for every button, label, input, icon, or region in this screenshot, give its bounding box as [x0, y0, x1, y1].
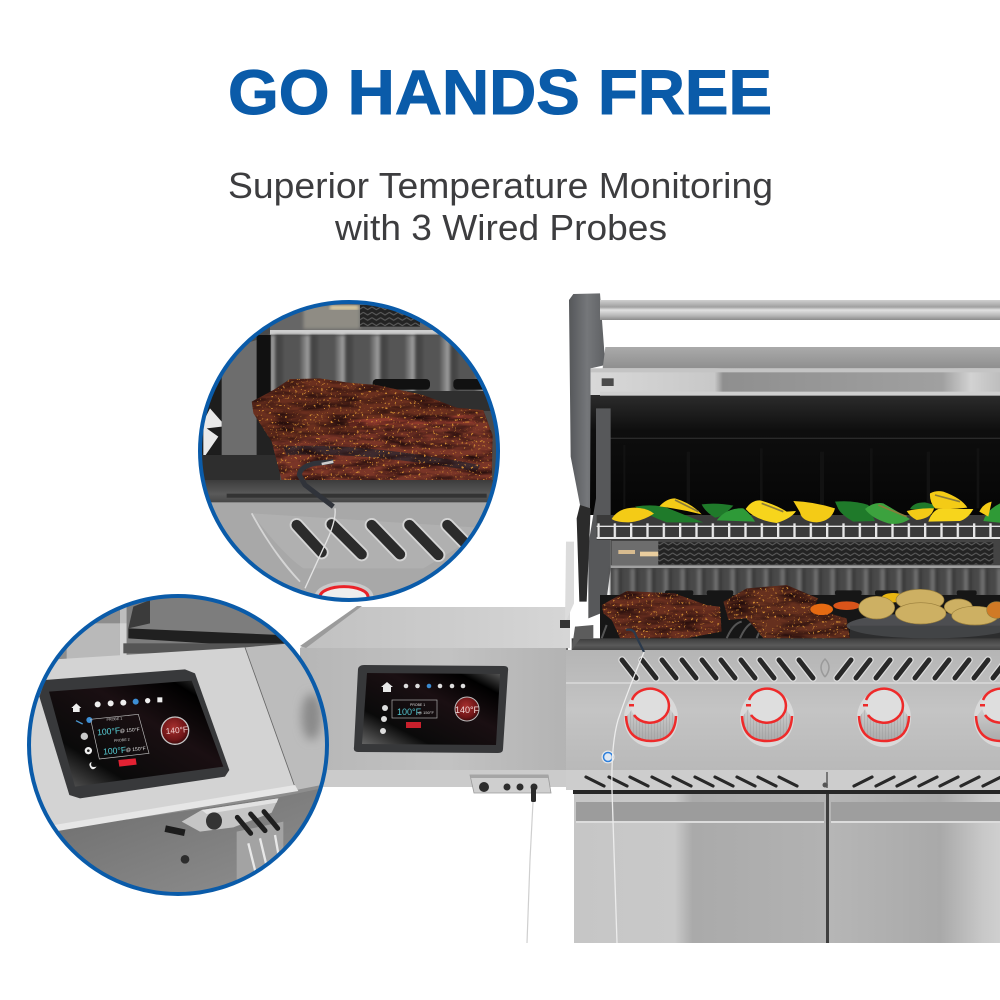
lid and interior [565, 293, 1000, 650]
red button [118, 758, 137, 767]
chevron flavorizer [658, 542, 993, 564]
logo flame [821, 659, 829, 677]
top rail [600, 300, 1000, 320]
shelf top [20, 647, 298, 830]
left side panel [202, 378, 222, 455]
large screen: PROBE 2 [114, 738, 130, 743]
main probe and wire [612, 630, 644, 943]
magnified circle: probe in meat [190, 295, 510, 612]
blue power button [602, 750, 614, 764]
cavity lip [572, 638, 1000, 650]
main grill [560, 293, 1000, 943]
subtitle: with 3 Wired Probes [334, 207, 667, 248]
side shelf screen: 100°F [397, 707, 422, 717]
title: GO HANDS FREE [228, 58, 772, 128]
temperature dial: 140°F [165, 724, 188, 736]
back wall [611, 540, 1000, 597]
lid stainless band [591, 368, 1000, 395]
circle border [200, 302, 498, 600]
circle border [29, 596, 327, 894]
upper background [67, 623, 127, 660]
upper vent slots [622, 660, 1000, 678]
lip [205, 480, 493, 498]
side shelf screen: 140°F [455, 705, 480, 715]
front panel [211, 502, 487, 596]
large screen [39, 669, 229, 798]
large screen: 100°F [97, 725, 121, 737]
side shelf screen: PROBE 1 [410, 703, 425, 707]
plate [847, 613, 1000, 638]
temperature dial [161, 717, 189, 744]
lid upper face [603, 347, 1000, 368]
potatoes [859, 589, 1000, 625]
steaks [602, 585, 850, 638]
grilled vegetables [612, 491, 1000, 524]
home icon [381, 682, 393, 692]
large screen: PROBE 1 [106, 717, 123, 722]
lower fascia [58, 789, 318, 890]
lower recess [237, 822, 283, 883]
subtitle: Superior Temperature Monitoring [228, 165, 773, 206]
upper back wall [270, 304, 432, 330]
knob 3 [857, 689, 911, 747]
lower vent strip [566, 770, 1000, 790]
knob 4 [974, 689, 1000, 747]
back wall streaks [269, 332, 483, 391]
large screen: 100°F [103, 745, 127, 757]
grill lid [126, 598, 275, 655]
probe port box [470, 775, 551, 802]
slots [297, 524, 477, 555]
large screen: @ 150°F [126, 746, 146, 754]
cabinet doors [574, 794, 1000, 943]
front control panel [566, 650, 1000, 770]
side shelf screen: @ 150°F [418, 710, 434, 715]
grill cavity bottom [600, 595, 1000, 639]
hinge arm [588, 408, 611, 618]
right shelf [245, 640, 330, 790]
large screen: @ 150°F [120, 727, 140, 735]
side shelf with touch screen [300, 606, 570, 943]
probe readout [91, 714, 149, 759]
port box [182, 798, 278, 833]
status icons [95, 697, 162, 707]
side shelf screen [354, 665, 508, 753]
side icons [76, 717, 97, 769]
pepper [810, 604, 833, 615]
door handles [576, 802, 1000, 823]
warming rack [597, 515, 1000, 540]
knob 1 [624, 689, 678, 747]
knob 2 [740, 689, 794, 747]
magnified circle: touch screen and ports [27, 594, 329, 896]
meat [252, 378, 493, 480]
probe wire [527, 802, 533, 943]
home icon [71, 703, 81, 712]
probe [299, 462, 335, 588]
subtitle [228, 165, 773, 248]
knob top [315, 582, 374, 596]
lid side arm [569, 293, 605, 508]
hinge detail [560, 620, 570, 628]
